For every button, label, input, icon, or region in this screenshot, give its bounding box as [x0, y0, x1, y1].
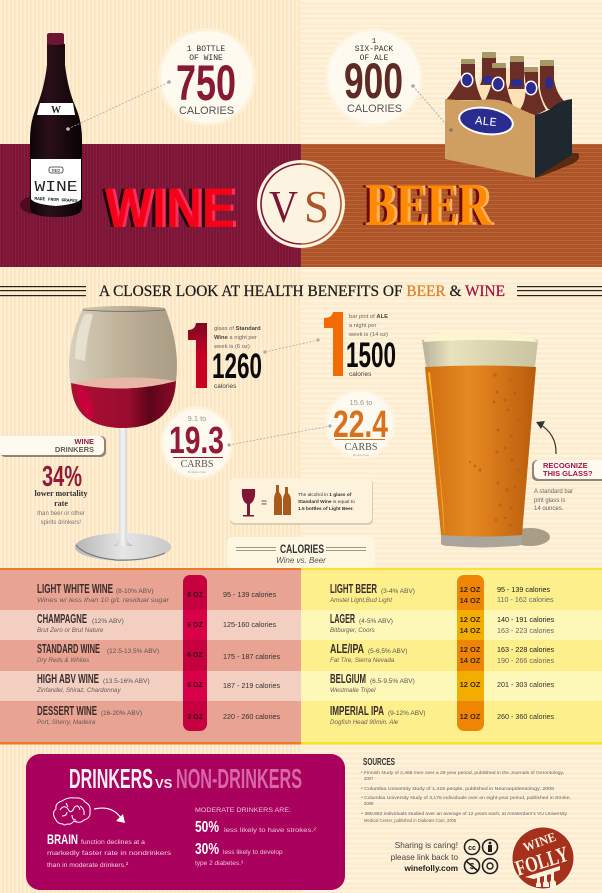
title: BEER: BEER — [368, 172, 495, 238]
text: moderate drinkers stats: type 2 diabetes.³ — [195, 860, 244, 867]
text: sources: Medical Center, published in Diabetes Care, 2005 — [364, 818, 457, 823]
row: champagne: (12% ABV) — [92, 618, 124, 625]
callout: wine drinkers 34%: than beer or other — [37, 511, 85, 517]
row: high abv wine: HIGH ABV WINE — [37, 671, 99, 686]
callout: six-pack of ale 900 calories: SIX-PACK — [355, 45, 393, 54]
callout: calories wine vs beer: Wine vs. Beer — [276, 556, 326, 565]
row: high abv wine: (13.5-16% ABV) — [103, 678, 150, 685]
text: brain function: function declines at a — [81, 839, 145, 846]
icon: creative commons licences: cc — [468, 845, 476, 852]
row: lager: Bitburger, Coors — [330, 627, 375, 634]
callout: six-pack of ale 900 calories: CALORIES — [347, 103, 402, 115]
text: moderate drinkers stats — [195, 807, 317, 867]
icon: wine bottle: RED — [52, 168, 60, 174]
callout: 1 bottle of wine 750 calories: 750 — [176, 55, 236, 111]
row: lager — [330, 611, 555, 635]
callout: wine carbs 19.3 — [160, 406, 234, 480]
text: sources: 2007 — [364, 776, 374, 781]
row: light white wine: LIGHT WHITE WINE — [37, 581, 113, 596]
text: brain function: markedly faster rate in nondrinkers — [47, 850, 172, 857]
callout: six-pack of ale 900 calories: OF ALE — [360, 54, 389, 63]
row: belgium — [330, 671, 555, 694]
callout: beer carbs 22.4: Per pint of beer — [353, 454, 369, 457]
title: BEER: BEER — [362, 172, 489, 238]
row: champagne: CHAMPAGNE — [37, 611, 87, 626]
connector: 1260 to 1500 — [263, 338, 320, 354]
icon: small beer bottles — [274, 485, 291, 515]
row: light beer: 110 - 162 calories — [497, 595, 554, 604]
stat: ale 1500 calories: calories — [349, 371, 372, 378]
row: light beer: 95 - 139 calories — [497, 585, 551, 594]
row: standard wine: STANDARD WINE — [37, 641, 100, 656]
row: ale/ipa: ALE/IPA — [330, 641, 364, 656]
callout: recognize this glass: THIS GLASS? — [543, 469, 593, 478]
title: BEER: BEER — [365, 172, 492, 238]
VS badge: V — [269, 181, 298, 232]
panel heading: VS — [155, 776, 173, 791]
row: light white wine: (8-10% ABV) — [116, 588, 154, 595]
row: light beer — [329, 581, 554, 604]
title: WINE: WINE — [105, 176, 235, 239]
table: wine calories: 6 OZ — [187, 592, 204, 599]
text: moderate drinkers stats: 30% — [195, 841, 219, 858]
callout: calories wine vs beer — [227, 537, 375, 568]
icon: pint glass of beer — [422, 330, 550, 548]
callout: wine drinkers 34%: DRINKERS — [55, 445, 94, 454]
logo: wine folly: FOLLY — [512, 841, 571, 881]
table: wine calories — [0, 568, 301, 744]
stat: wine 1260 calories: calories — [214, 383, 237, 390]
row: champagne: 125-160 calories — [223, 620, 277, 629]
callout: wine drinkers 34% — [0, 436, 106, 526]
callout: alcohol equivalence: The alcohol in 1 glass of — [298, 492, 352, 498]
row: ale/ipa: (5-6.5% ABV) — [368, 648, 407, 655]
row: standard wine: (12.5-13.5% ABV) — [107, 648, 159, 655]
callout: wine carbs 19.3: 9.1 to — [188, 414, 206, 423]
row: light beer: (3-4% ABV) — [381, 588, 415, 595]
callout: wine drinkers 34%: 34% — [42, 461, 82, 493]
row: lager: 163 - 223 calories — [497, 626, 555, 635]
text: sources: SOURCES — [363, 757, 395, 768]
icon: wine bottle: W — [51, 105, 61, 116]
table: beer calories: 12 OZ — [460, 645, 481, 654]
stat: ale 1500 calories: bar pint of ALE — [349, 314, 388, 320]
table: beer calories: 12 OZ — [460, 680, 481, 689]
callout: recognize this glass: 14 ounces. — [534, 506, 564, 512]
text: brain function — [47, 831, 172, 869]
panel heading: DRINKERS — [69, 763, 153, 794]
row: dessert wine: Port, Sherry, Madeira — [37, 719, 96, 726]
callout: six-pack of ale 900 calories — [325, 28, 423, 126]
stat: ale 1500 calories: 1500 — [346, 336, 396, 375]
title: WINE: WINE — [102, 176, 232, 239]
stat: wine 1260 calories: glass of Standard — [214, 326, 261, 332]
text: sources: ⁴ 369,862 individuals studied over an average of 12 years each, at Amsterdam's VU University — [361, 811, 568, 816]
callout: wine carbs 19.3: Per glass of wine — [188, 471, 207, 474]
table: beer calories: 14 OZ — [460, 656, 481, 665]
callout: wine carbs 19.3: 19.3 — [169, 420, 224, 462]
callout: wine carbs 19.3: CARBS — [181, 459, 213, 470]
row: lager: (4-5% ABV) — [359, 618, 393, 625]
text: brain function: than in moderate drinkers.² — [47, 862, 129, 869]
panel heading: NON-DRINKERS — [176, 763, 302, 794]
row: belgium: Westmalle Tripel — [330, 687, 376, 694]
callout: wine drinkers 34%: lower mortality — [35, 489, 87, 498]
stat: wine 1260 calories: Wine a night per — [214, 335, 257, 341]
serving pill — [457, 575, 484, 731]
table: beer calories: 14 OZ — [460, 596, 481, 605]
callout: recognize this glass — [532, 460, 602, 512]
table: wine calories: 6 OZ — [187, 682, 204, 689]
row: standard wine: 175 - 187 calories — [223, 652, 281, 661]
row: ale/ipa: Fat Tire, Sierra Nevada — [330, 657, 395, 664]
table: beer calories: 12 OZ — [460, 585, 481, 594]
title band: wine — [0, 144, 301, 267]
icon: wine bottle: WINE — [34, 179, 78, 196]
text: sources: 2006 — [364, 801, 374, 806]
table: beer calories: 12 OZ — [460, 712, 481, 721]
serving pill — [183, 575, 207, 731]
callout: alcohol equivalence — [230, 478, 373, 525]
stat: ale 1500 calories — [324, 312, 396, 378]
text: moderate drinkers stats: less likely to have strokes.² — [224, 827, 317, 834]
text: moderate drinkers stats: MODERATE DRINKERS ARE: — [195, 807, 291, 814]
row: belgium: 201 - 303 calories — [497, 680, 555, 689]
logo: wine folly: WINE — [521, 829, 558, 855]
row: standard wine — [37, 641, 281, 664]
connector: carbs — [227, 424, 332, 447]
callout: wine drinkers 34%: WINE — [74, 437, 94, 446]
icon: creative commons licences: $ — [470, 862, 475, 871]
callout: beer carbs 22.4: 22.4 — [333, 404, 388, 446]
row: light white wine: Wines w/ less than 10 g/L residual sugar — [37, 597, 170, 604]
row: lager: 140 - 191 calories — [497, 615, 555, 624]
row: imperial ipa — [330, 703, 555, 726]
row: high abv wine: 187 - 219 calories — [223, 681, 281, 690]
callout: beer carbs 22.4 — [325, 389, 395, 459]
text: sources — [361, 757, 571, 823]
callout: 1 bottle of wine 750 calories: CALORIES — [179, 105, 234, 117]
carton front — [445, 99, 535, 178]
text: sharing is caring — [391, 841, 458, 873]
title band: beer — [301, 144, 602, 267]
callout: wine drinkers 34%: spirits drinkers¹ — [41, 520, 81, 526]
table: wine calories: 3 OZ — [187, 714, 204, 721]
arrow: brain — [94, 808, 125, 823]
callout: recognize this glass: RECOGNIZE — [543, 461, 588, 470]
table: beer calories: 12 OZ — [460, 615, 481, 624]
row: dessert wine: (16-20% ABV) — [101, 710, 142, 717]
stat: ale 1500 calories: week is (14 oz) — [348, 332, 388, 338]
icon: six-pack of ale: ALE — [474, 114, 497, 130]
icon: wine bottle: MADE FROM GRAPES — [34, 196, 78, 204]
callout: beer carbs 22.4: 15.6 to — [350, 398, 372, 407]
carton side — [535, 99, 572, 178]
row: champagne — [37, 611, 277, 634]
row: imperial ipa: (9-12% ABV) — [388, 710, 426, 717]
callout: six-pack of ale 900 calories: 1 — [372, 38, 377, 46]
arrow: to pint glass — [536, 421, 556, 454]
front row bottles — [446, 64, 546, 115]
row: belgium: BELGIUM — [330, 671, 366, 686]
row: light white wine: 95 - 139 calories — [223, 590, 277, 599]
row: imperial ipa: IMPERIAL IPA — [330, 703, 384, 718]
text: sources: ² Columbia University study of 1,416 people, published in Neuroepidemiology, 2006 — [361, 786, 555, 791]
icon: wine bottle — [20, 33, 82, 217]
callout: recognize this glass: pint glass is — [534, 498, 565, 504]
text: sharing is caring: Sharing is caring! — [395, 841, 458, 850]
VS badge — [257, 160, 345, 248]
table: wine calories: 6 OZ — [187, 622, 204, 629]
table: beer calories: 14 OZ — [460, 626, 481, 635]
text: moderate drinkers stats: less likely to develop — [223, 849, 283, 856]
icon: six-pack of ale — [445, 52, 579, 178]
stat: wine 1260 calories — [188, 323, 262, 390]
stat: wine 1260 calories: week is (6 oz) — [213, 344, 250, 350]
row: light beer: Amstel Light,Bud Light — [329, 597, 392, 604]
background: beer side — [301, 0, 602, 893]
row: high abv wine: Zinfandel, Shiraz, Chardonnay — [36, 687, 121, 694]
row: ale/ipa — [330, 641, 555, 665]
row: standard wine: Dry Reds & Whites — [37, 657, 89, 664]
back row bottles — [480, 57, 564, 109]
callout: alcohol equivalence: = — [261, 498, 267, 509]
connector: six-pack to calories — [411, 84, 453, 132]
text: sources: ¹ Finnish study of 2,468 men over a 29 year period, published in the Journals of Gerontology, — [361, 770, 564, 775]
callout: alcohol equivalence: 1.5 bottles of Light Beer. — [298, 506, 354, 512]
text: sources: ³ Columbia University study of 3,176 individuals over an eight-year period, published in Stroke, — [361, 795, 571, 800]
callout: wine drinkers 34%: rate — [54, 499, 68, 508]
icon: brain — [54, 798, 90, 825]
row: ale/ipa: 163 - 228 calories — [497, 645, 555, 654]
text: sharing is caring: please link back to — [391, 853, 458, 862]
panel heading — [69, 763, 302, 794]
row: high abv wine — [36, 671, 281, 694]
row: champagne: Brut Zero or Brut Nature — [37, 627, 104, 634]
icon: small wine glass — [242, 489, 255, 516]
heading: closer look: A CLOSER LOOK AT HEALTH BENEFITS OF BEER & WINE — [99, 283, 505, 300]
stat: ale 1500 calories: a night per — [349, 323, 376, 329]
text: sharing is caring: winefolly.com — [403, 864, 458, 873]
connector: wine bottle to calories — [66, 80, 171, 131]
ALE label — [456, 103, 516, 139]
callout: six-pack of ale 900 calories: 900 — [344, 53, 403, 109]
callout: recognize this glass: A standard bar — [534, 489, 573, 495]
title: WINE: WINE — [108, 176, 238, 239]
row: lager: LAGER — [330, 611, 355, 626]
row: imperial ipa: Dogfish Head 90min. Ale — [330, 719, 399, 726]
row: dessert wine: 220 - 260 calories — [223, 712, 281, 721]
logo: wine folly — [511, 826, 575, 890]
table: wine calories: 6 OZ — [187, 652, 204, 659]
row: light white wine — [37, 581, 277, 604]
text: brain function: BRAIN — [47, 831, 78, 847]
callout: 1 bottle of wine 750 calories: OF WINE — [189, 54, 223, 63]
callout: calories wine vs beer: CALORIES — [280, 542, 324, 556]
row: ale/ipa: 190 - 266 calories — [497, 656, 555, 665]
row: belgium: (6.5-9.5% ABV) — [370, 678, 415, 685]
text: moderate drinkers stats: 50% — [195, 819, 219, 836]
stat: wine 1260 calories: 1260 — [212, 347, 262, 386]
row: dessert wine — [37, 703, 281, 726]
callout: 1 bottle of wine 750 calories: 1 BOTTLE — [187, 45, 225, 54]
cream dividers behind bottles — [476, 68, 556, 116]
table: beer calories — [301, 568, 602, 744]
row: imperial ipa: 260 - 360 calories — [497, 712, 555, 721]
row: light beer: LIGHT BEER — [330, 581, 377, 596]
callout: beer carbs 22.4: CARBS — [345, 442, 377, 453]
icon: wine glass — [69, 306, 177, 561]
panel: drinkers vs non-drinkers — [26, 754, 345, 890]
VS badge: S — [304, 181, 329, 232]
background: wine side — [0, 0, 301, 893]
row: dessert wine: DESSERT WINE — [37, 703, 97, 718]
callout: alcohol equivalence: Standard Wine is equal to — [298, 499, 355, 505]
icon: creative commons licences — [464, 840, 498, 874]
callout: 1 bottle of wine 750 calories — [158, 28, 256, 126]
